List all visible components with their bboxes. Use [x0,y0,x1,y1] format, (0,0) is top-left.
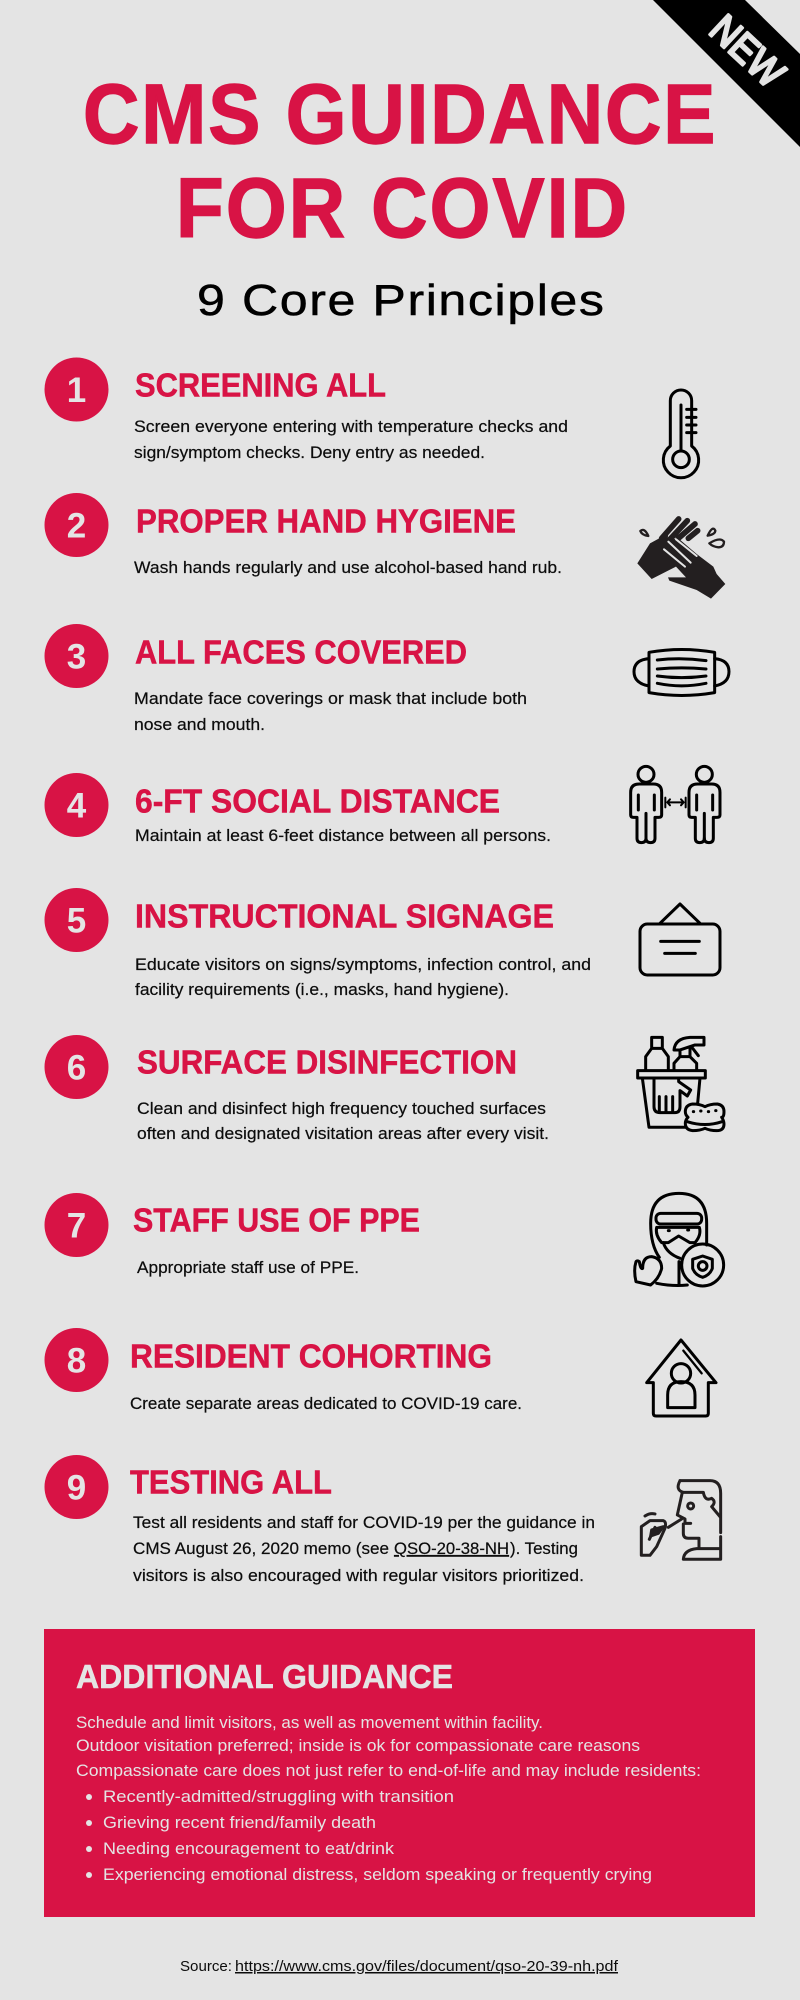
number badge 6 [44,1035,108,1099]
bullet list: Recently-admitted/struggling with transition [103,1788,454,1806]
corner ribbon: NEW: NEW [701,7,793,96]
body 2: Wash hands regularly and use alcohol-based hand rub. [134,559,562,577]
number badge 2 [44,493,108,557]
body 5: Educate visitors on signs/symptoms, infection control, and [135,956,591,974]
bullet list: Needing encouragement to eat/drink [103,1840,395,1858]
body 3: Mandate face coverings or mask that include both [134,690,527,708]
heading: additional guidance: ADDITIONAL GUIDANCE [76,1658,453,1695]
body 9: ). Testing [510,1540,578,1558]
body 8: Create separate areas dedicated to COVID-19 care. [130,1395,522,1413]
icon: nasal swab test [641,1481,721,1559]
number badge 4: 4 [67,786,87,826]
icon: thermometer [663,390,699,478]
number badge 8: 8 [67,1342,86,1380]
body 9: Test all residents and staff for COVID-19 per the guidance in [133,1514,595,1532]
icon: face mask [634,649,729,695]
corner ribbon: NEW [653,0,800,147]
guidance paragraph: Outdoor visitation preferred; inside is ok for compassionate care reasons [76,1737,640,1755]
number badge 5: 5 [67,902,86,940]
body 3 [134,690,527,734]
heading 4: 6-FT SOCIAL DISTANCE [135,782,500,820]
bullet list: Grieving recent friend/family death [103,1814,376,1832]
number badge 9 [44,1455,108,1519]
icon: two people six feet apart [631,766,720,843]
body 5 [135,956,591,999]
heading 5: INSTRUCTIONAL SIGNAGE [135,898,554,934]
body 9: CMS August 26, 2020 memo (see [133,1540,389,1558]
panel: principle 9 testing all [44,1455,721,1585]
icon: hanging sign [640,904,720,975]
number badge 7: 7 [67,1206,86,1246]
icon: staff in PPE with shield [635,1193,724,1286]
guidance paragraph: Compassionate care does not just refer to end-of-life and may include residents: [76,1762,701,1780]
icon: washing hands [637,519,725,599]
heading 8: RESIDENT COHORTING [130,1338,492,1374]
number badge 6: 6 [67,1048,86,1088]
body 1: Screen everyone entering with temperature checks and [134,418,568,436]
panel: principle 5 instructional signage [44,888,720,999]
body 9: QSO-20-38-NH [394,1540,509,1558]
source line: https://www.cms.gov/files/document/qso-20-39-nh.pdf [235,1958,619,1975]
title [83,68,715,256]
panel: principle 3 all faces covered [44,624,729,734]
body 6 [137,1100,549,1143]
body 7: Appropriate staff use of PPE. [137,1259,359,1277]
heading 2: PROPER HAND HYGIENE [136,502,516,540]
panel: principle 1 screening all [44,358,699,478]
subtitle: 9 Core Principles [197,275,604,324]
title: FOR COVID [176,162,627,256]
heading 9: TESTING ALL [130,1464,332,1500]
heading 7: STAFF USE OF PPE [133,1202,420,1238]
number badge 9: 9 [67,1468,86,1508]
body 1: sign/symptom checks. Deny entry as needed. [134,444,485,462]
number badge 3: 3 [67,638,86,676]
number badge 1: 1 [67,371,86,410]
body 6: often and designated visitation areas after every visit. [137,1125,549,1143]
panel: principle 6 surface disinfection [44,1035,724,1143]
panel: principle 7 staff use of PPE [44,1193,724,1286]
heading 1: SCREENING ALL [135,366,386,404]
number badge 2: 2 [67,506,86,546]
bullet list [86,1788,652,1884]
number badge 1 [44,358,108,422]
guidance paragraph: Schedule and limit visitors, as well as movement within facility. [76,1714,543,1732]
panel: principle 8 resident cohorting [44,1328,716,1416]
panel: principle 4 social distance [44,766,720,845]
heading 6: SURFACE DISINFECTION [137,1044,517,1080]
body 4: Maintain at least 6-feet distance between all persons. [135,827,551,845]
body 5: facility requirements (i.e., masks, hand hygiene). [135,981,509,999]
number badge 4 [44,773,108,837]
title: CMS GUIDANCE [83,68,715,162]
bullet list: Experiencing emotional distress, seldom speaking or frequently crying [103,1866,652,1884]
source line: Source: [180,1958,232,1975]
body 9 [133,1514,595,1585]
panel: additional guidance [44,1629,755,1917]
body 1 [134,418,568,462]
number badge 3 [44,624,108,688]
body 9: visitors is also encouraged with regular visitors prioritized. [133,1567,584,1585]
panel: principle 2 proper hand hygiene [44,493,725,599]
body 3: nose and mouth. [134,716,265,734]
icon: person in house [647,1340,716,1416]
icon: cleaning bucket [638,1037,724,1131]
body 6: Clean and disinfect high frequency touched surfaces [137,1100,546,1118]
number badge 8 [44,1328,108,1392]
number badge 5 [44,888,108,952]
guidance paragraph [76,1714,701,1780]
number badge 7 [44,1193,108,1257]
heading 3: ALL FACES COVERED [135,634,467,670]
